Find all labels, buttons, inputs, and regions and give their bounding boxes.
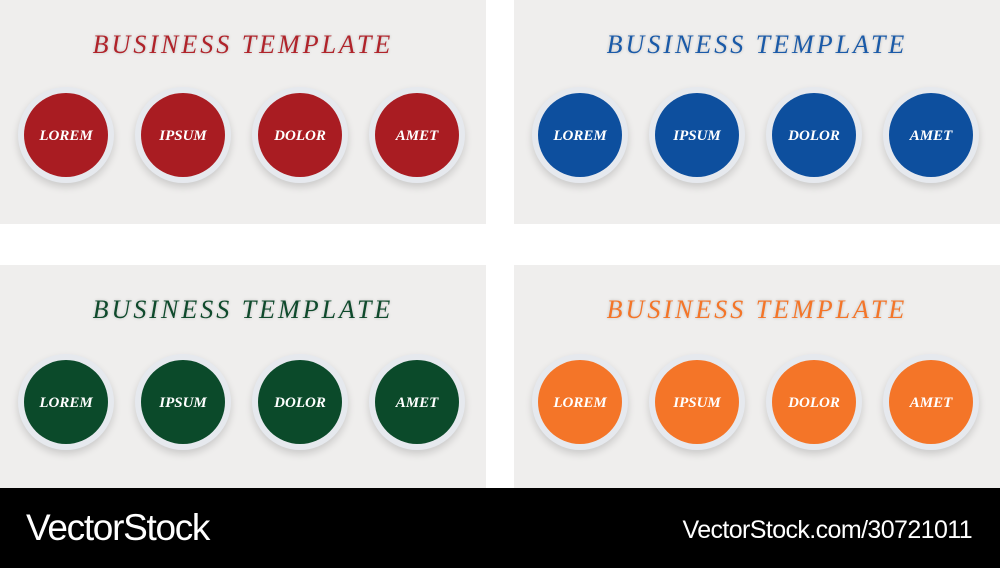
circle dolor: DOLOR	[274, 128, 326, 144]
circle ipsum: IPSUM	[159, 128, 207, 144]
circle ipsum	[135, 87, 231, 183]
circle amet: AMET	[396, 128, 438, 144]
circle amet: AMET	[910, 395, 952, 411]
circle dolor	[766, 87, 862, 183]
circle lorem: LOREM	[553, 395, 607, 411]
circle ipsum	[649, 87, 745, 183]
circle amet: AMET	[396, 395, 438, 411]
circle ipsum: IPSUM	[159, 395, 207, 411]
circle dolor	[252, 354, 348, 450]
circle lorem: LOREM	[553, 128, 607, 144]
circle lorem: LOREM	[39, 128, 93, 144]
circle dolor: DOLOR	[788, 128, 840, 144]
brand: VectorStock	[26, 507, 209, 548]
circle amet	[369, 354, 465, 450]
title blue: BUSINESS TEMPLATE	[607, 30, 907, 59]
panel: green	[0, 265, 486, 489]
circle lorem	[532, 354, 628, 450]
footer bar	[0, 488, 1000, 568]
circle ipsum	[135, 354, 231, 450]
circle ipsum	[649, 354, 745, 450]
id text: VectorStock.com/30721011	[682, 516, 972, 544]
panel: blue	[514, 0, 1000, 224]
circle lorem	[532, 87, 628, 183]
circle amet	[883, 87, 979, 183]
circle amet	[883, 354, 979, 450]
circle amet	[369, 87, 465, 183]
title green: BUSINESS TEMPLATE	[93, 295, 393, 324]
circle dolor: DOLOR	[274, 395, 326, 411]
circle lorem	[18, 354, 114, 450]
circle lorem	[18, 87, 114, 183]
title red: BUSINESS TEMPLATE	[93, 30, 393, 59]
panel: red	[0, 0, 486, 224]
circle dolor	[252, 87, 348, 183]
circle ipsum: IPSUM	[673, 395, 721, 411]
circle dolor: DOLOR	[788, 395, 840, 411]
panel: orange	[514, 265, 1000, 489]
circle lorem: LOREM	[39, 395, 93, 411]
circle ipsum: IPSUM	[673, 128, 721, 144]
circle amet: AMET	[910, 128, 952, 144]
title orange: BUSINESS TEMPLATE	[607, 295, 907, 324]
circle dolor	[766, 354, 862, 450]
